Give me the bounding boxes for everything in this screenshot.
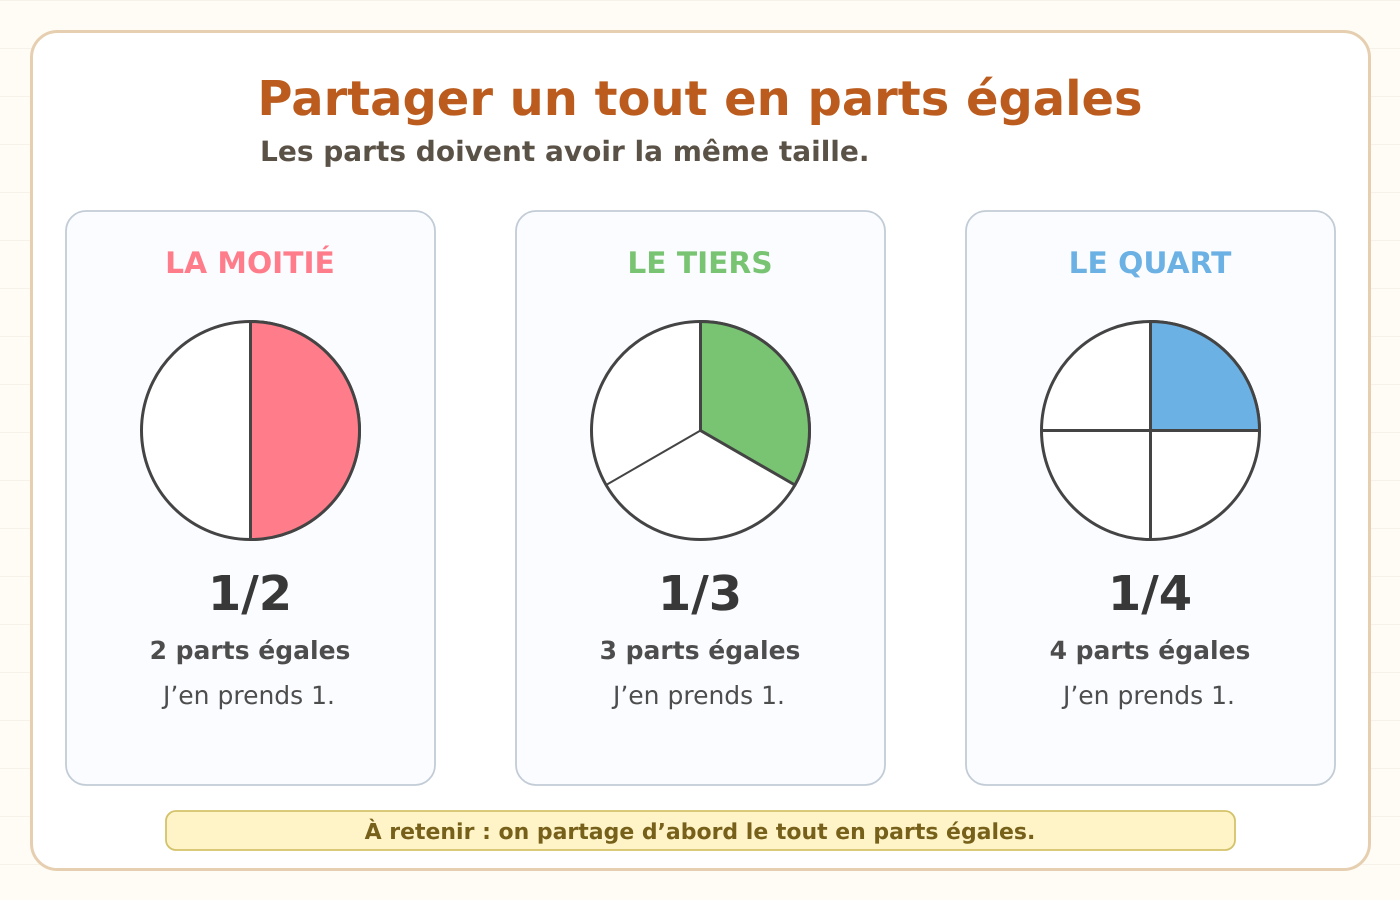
chart: one third	[592, 322, 810, 540]
label: parts: 4 parts égales	[1050, 636, 1250, 665]
label: parts: 3 parts égales	[600, 636, 800, 665]
panel: le quart	[966, 211, 1335, 785]
label: parts: 2 parts égales	[150, 636, 350, 665]
heading: le tiers: LE TIERS	[627, 246, 773, 281]
chart: one half	[142, 322, 360, 540]
callout: À retenir : on partage d’abord le tout en parts égales.	[365, 818, 1035, 845]
fraction: 1/4: 1/4	[1108, 566, 1192, 622]
fraction: 1/2: 1/2	[208, 566, 292, 622]
callout	[166, 811, 1235, 850]
caption: J’en prends 1.	[1061, 681, 1235, 710]
chart: one quarter	[1042, 322, 1260, 540]
fraction: 1/3: 1/3	[658, 566, 742, 622]
heading: la moitié: LA MOITIÉ	[165, 245, 335, 281]
title: Partager un tout en parts égales	[257, 71, 1143, 127]
subtitle: Les parts doivent avoir la même taille.	[260, 135, 870, 168]
panel: le tiers	[516, 211, 885, 785]
caption: J’en prends 1.	[611, 681, 785, 710]
heading: le quart: LE QUART	[1069, 246, 1232, 281]
panel: la moitié	[66, 211, 435, 785]
caption: J’en prends 1.	[161, 681, 335, 710]
